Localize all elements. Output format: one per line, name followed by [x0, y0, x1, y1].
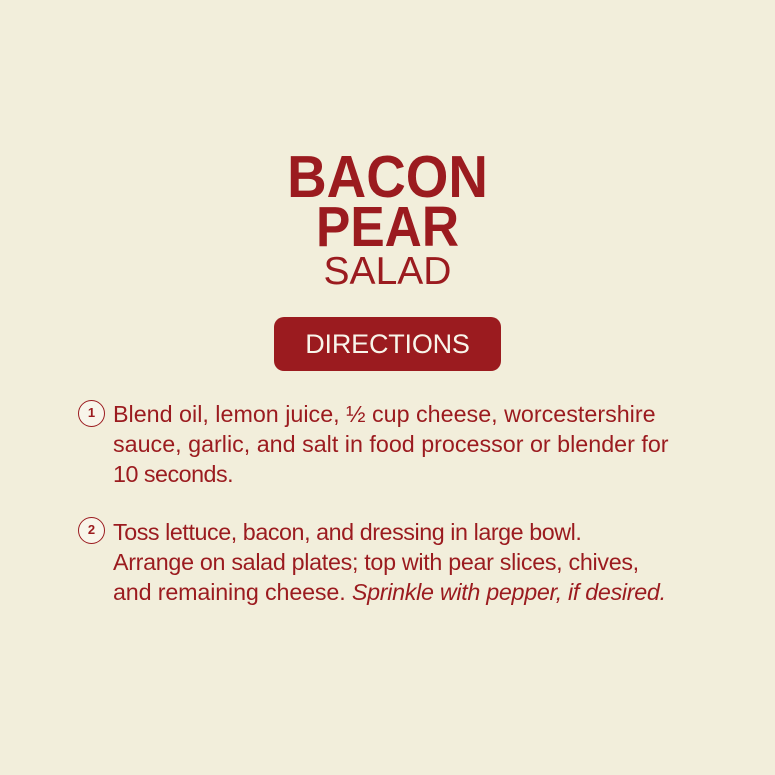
step 1 text: 10 seconds.	[113, 461, 233, 487]
step 2 text	[113, 519, 666, 605]
step 1 text	[113, 401, 669, 487]
step 2	[78, 517, 666, 605]
step 1 number icon	[78, 400, 105, 427]
directions badge	[274, 317, 501, 371]
step 1	[78, 400, 669, 487]
step 2 number icon	[78, 517, 105, 544]
step 1 text: sauce, garlic, and salt in food processor or blender for	[113, 431, 669, 457]
step 2 number icon: 2	[88, 522, 95, 537]
step 2 text: Toss lettuce, bacon, and dressing in large bowl.	[113, 519, 581, 545]
step 2 text: and remaining cheese. Sprinkle with pepper, if desired.	[113, 579, 666, 605]
title: PEAR	[316, 195, 459, 259]
title	[287, 144, 488, 293]
step 1 text: Blend oil, lemon juice, ½ cup cheese, worcestershire	[113, 401, 656, 427]
directions badge: DIRECTIONS	[305, 329, 470, 359]
title: SALAD	[324, 250, 451, 293]
title: BACON	[287, 144, 488, 210]
step 1 number icon: 1	[88, 405, 95, 420]
step 2 text: Arrange on salad plates; top with pear slices, chives,	[113, 549, 639, 575]
